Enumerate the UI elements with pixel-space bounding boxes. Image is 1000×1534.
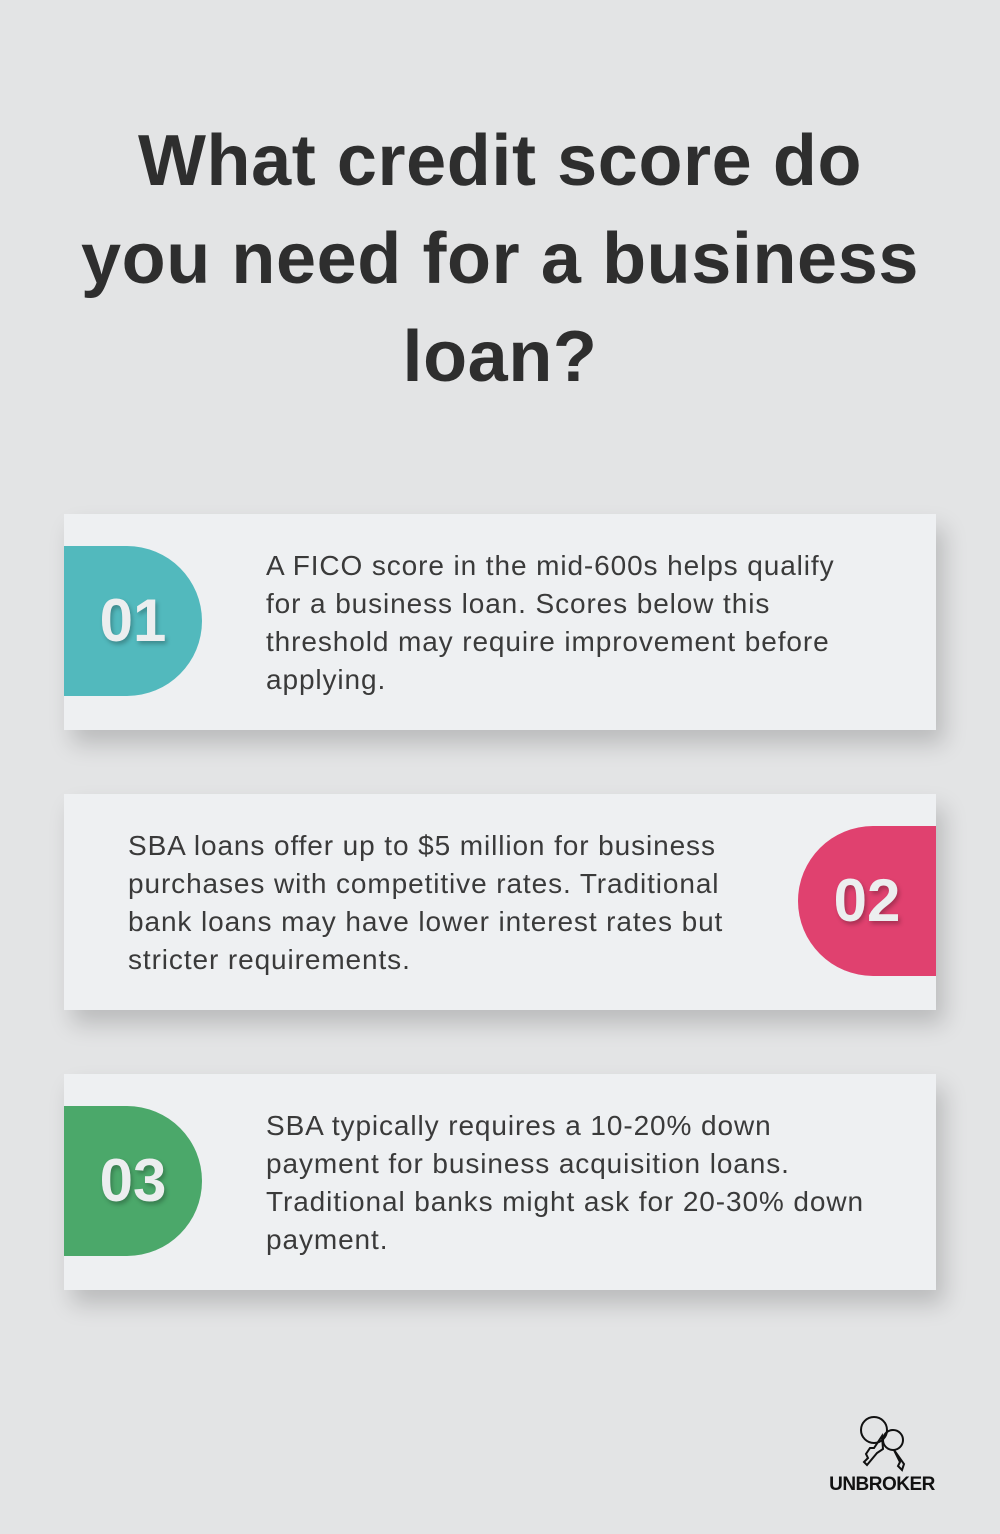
badge 02	[798, 826, 936, 976]
badge 03	[64, 1106, 202, 1256]
badge 03: 03	[100, 1147, 166, 1214]
panel: card 03	[64, 1074, 936, 1290]
text 01: applying.	[266, 664, 386, 695]
text 03: payment.	[266, 1224, 388, 1255]
icon: keys	[860, 1416, 906, 1472]
text 03: payment for business acquisition loans.	[266, 1148, 790, 1179]
title: What credit score do	[138, 121, 862, 201]
text 03: SBA typically requires a 10-20% down	[266, 1110, 772, 1141]
text 02: SBA loans offer up to $5 million for business	[128, 830, 716, 861]
text 01: for a business loan. Scores below this	[266, 588, 770, 619]
text 03	[266, 1110, 864, 1255]
text 01	[266, 550, 834, 695]
text 02	[128, 830, 723, 975]
logo: unbroker	[829, 1416, 935, 1495]
text 03: Traditional banks might ask for 20-30% down	[266, 1186, 864, 1217]
badge 01: 01	[100, 587, 166, 654]
badge 01	[64, 546, 202, 696]
title: loan?	[402, 317, 598, 397]
logo text: UNBROKER	[829, 1474, 935, 1495]
text 01: threshold may require improvement before	[266, 626, 830, 657]
text 02: bank loans may have lower interest rates but	[128, 906, 723, 937]
badge 02: 02	[834, 867, 900, 934]
title: you need for a business	[81, 219, 919, 299]
panel: card 02	[64, 794, 936, 1010]
panel: card 01	[64, 514, 936, 730]
text 01: A FICO score in the mid-600s helps qualify	[266, 550, 834, 581]
text 02: stricter requirements.	[128, 944, 411, 975]
text 02: purchases with competitive rates. Traditional	[128, 868, 719, 899]
title	[81, 121, 919, 397]
